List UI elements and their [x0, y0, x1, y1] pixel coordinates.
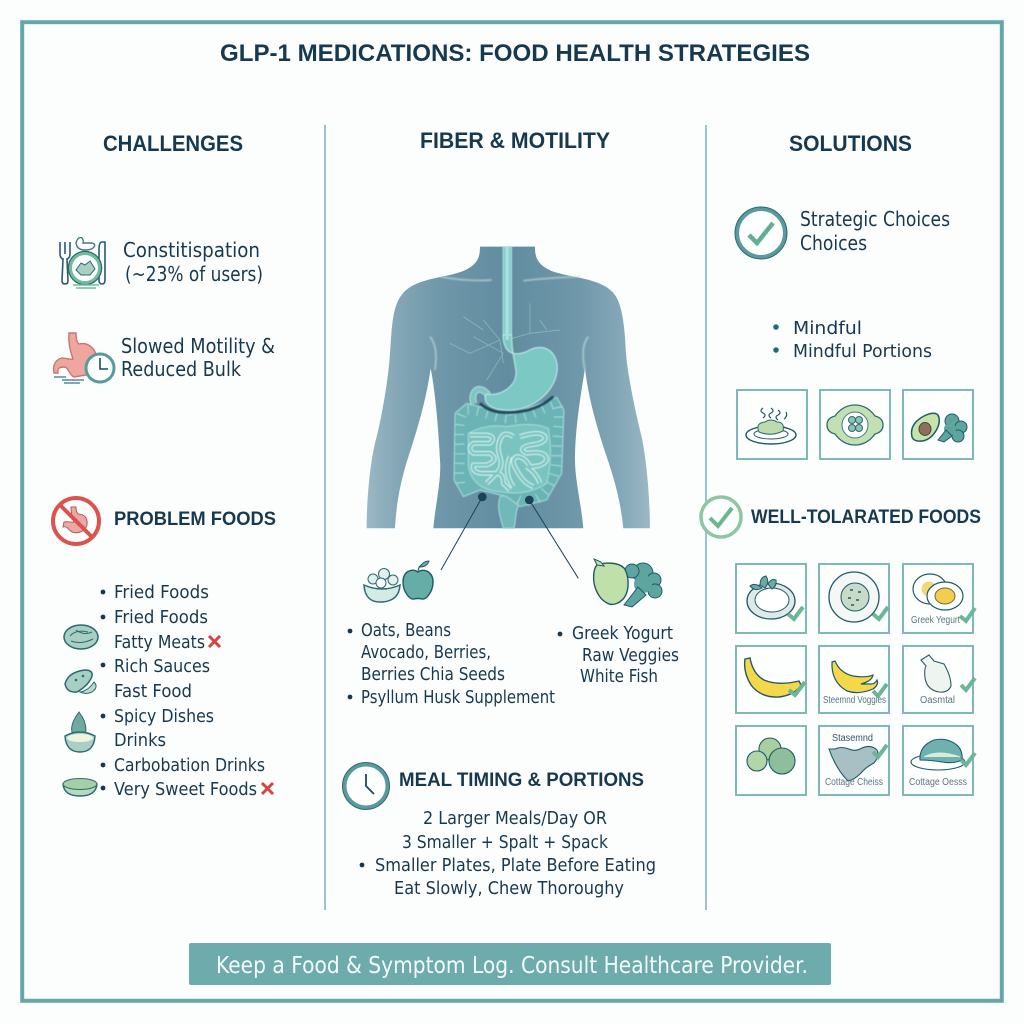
text: meal timing details: Eat Slowly, Chew Thoroughy — [394, 878, 624, 899]
heading: fiber and motility: FIBER & MOTILITY — [420, 128, 610, 153]
text: slowed motility — [121, 334, 275, 381]
food tile: green balls — [736, 726, 806, 795]
icon: red cross — [262, 783, 273, 794]
food tile: steamed fish: Stasemnd — [832, 733, 873, 744]
list: problem foods — [101, 582, 265, 800]
food tile: two bananas: Steemnd Voggies — [823, 695, 886, 706]
text: meal timing details: 2 Larger Meals/Day OR — [423, 808, 607, 829]
text: strategic choices — [800, 207, 950, 255]
food tile: leafy rice plate — [736, 564, 806, 633]
icon: fried dish — [64, 625, 98, 649]
food tile: boiled eggs: Greek Yegurt — [911, 615, 960, 626]
icon: plate with fork and knife — [60, 238, 105, 288]
list: problem foods: Fried Foods — [114, 582, 209, 603]
panel: challenges — [53, 131, 276, 800]
text: gentle foods — [558, 623, 679, 687]
text: constipation — [123, 238, 263, 286]
text: meal timing details: 3 Smaller + Spalt + Spack — [402, 832, 608, 853]
banner — [189, 943, 831, 985]
text: gentle foods: Greek Yogurt — [572, 623, 673, 644]
list: problem foods: Drinks — [114, 730, 166, 751]
text: meal timing details — [360, 808, 656, 899]
food tile: green dish — [820, 390, 890, 459]
food tile: banana — [736, 646, 806, 713]
text: constipation: Constitispation — [123, 238, 260, 262]
icon: sandwich dish — [65, 670, 96, 694]
list: problem foods: Fast Food — [114, 681, 192, 702]
heading: meal timing: MEAL TIMING & PORTIONS — [399, 770, 644, 791]
icon: no stomach — [53, 498, 99, 544]
list: problem foods: Fried Foods — [114, 607, 208, 628]
text: slowed motility: Slowed Motility & — [121, 334, 275, 358]
food tile: cottage cheese plate — [903, 726, 975, 795]
food tile: cottage cheese plate: Cottage Oesss — [909, 777, 967, 788]
text: strategic choices: Strategic Choices — [800, 207, 950, 231]
text: constipation: (~23% of users) — [125, 262, 263, 286]
food tile: steamed fish — [819, 726, 889, 795]
icon: red cross — [209, 636, 220, 647]
food tile: steaming plate — [737, 390, 807, 459]
icon: oats bowl and apple — [364, 561, 433, 602]
icon: green apple and broccoli — [594, 559, 662, 607]
list: problem foods: Fatty Meats — [114, 632, 205, 653]
list: problem foods: Spicy Dishes — [114, 706, 214, 727]
food tile: two bananas — [819, 646, 889, 713]
text: meal timing details: Smaller Plates, Plate Before Eating — [375, 855, 656, 876]
list: problem foods: Very Sweet Foods — [114, 779, 257, 800]
icon: green check circle — [701, 497, 741, 537]
list: mindful portions — [773, 318, 932, 362]
title: GLP-1 MEDICATIONS: FOOD HEALTH STRATEGIES — [220, 40, 810, 67]
heading: challenges: CHALLENGES — [103, 131, 243, 156]
text: gentle foods: Raw Veggies — [582, 645, 679, 666]
heading: problem foods: PROBLEM FOODS — [114, 509, 276, 530]
food tile: avocado and broccoli — [903, 390, 973, 459]
text: strategic choices: Choices — [800, 231, 867, 255]
text: fiber foods: Oats, Beans — [361, 620, 451, 641]
panel: fiber and motility — [342, 128, 679, 899]
list: mindful portions: Mindful — [793, 318, 862, 339]
text: fiber foods: Avocado, Berries, — [361, 642, 491, 663]
text: fiber foods — [348, 620, 555, 708]
text: gentle foods: White Fish — [580, 666, 658, 687]
list: problem foods: Rich Sauces — [114, 656, 210, 677]
text: fiber foods: Psyllum Husk Supplement — [361, 687, 555, 708]
panel: solutions — [701, 131, 981, 795]
icon: check circle — [735, 207, 787, 259]
banner: Keep a Food & Symptom Log. Consult Healthcare Provider. — [216, 953, 808, 979]
food tile: oatmeal packet — [903, 646, 975, 713]
list: mindful portions: Mindful Portions — [793, 341, 932, 362]
text: fiber foods: Berries Chia Seeds — [361, 664, 505, 685]
icon: stomach with clock — [54, 333, 114, 383]
text: slowed motility: Reduced Bulk — [121, 357, 241, 381]
food tile: steamed fish: Cottage Cheiss — [825, 777, 883, 788]
food tile: boiled eggs — [903, 564, 975, 633]
icon: bowl with leaf — [65, 712, 95, 752]
food tile: round dish — [819, 564, 889, 633]
heading: solutions: SOLUTIONS — [789, 131, 912, 156]
icon: soup bowl — [63, 778, 97, 796]
food tile: oatmeal packet: Oasmtal — [920, 695, 955, 706]
icon: clock — [342, 762, 390, 810]
heading: well-tolerated foods: WELL-TOLARATED FOODS — [751, 507, 981, 528]
list: problem foods: Carbobation Drinks — [114, 755, 265, 776]
anatomy illustration: torso and digestive tract — [367, 247, 650, 578]
